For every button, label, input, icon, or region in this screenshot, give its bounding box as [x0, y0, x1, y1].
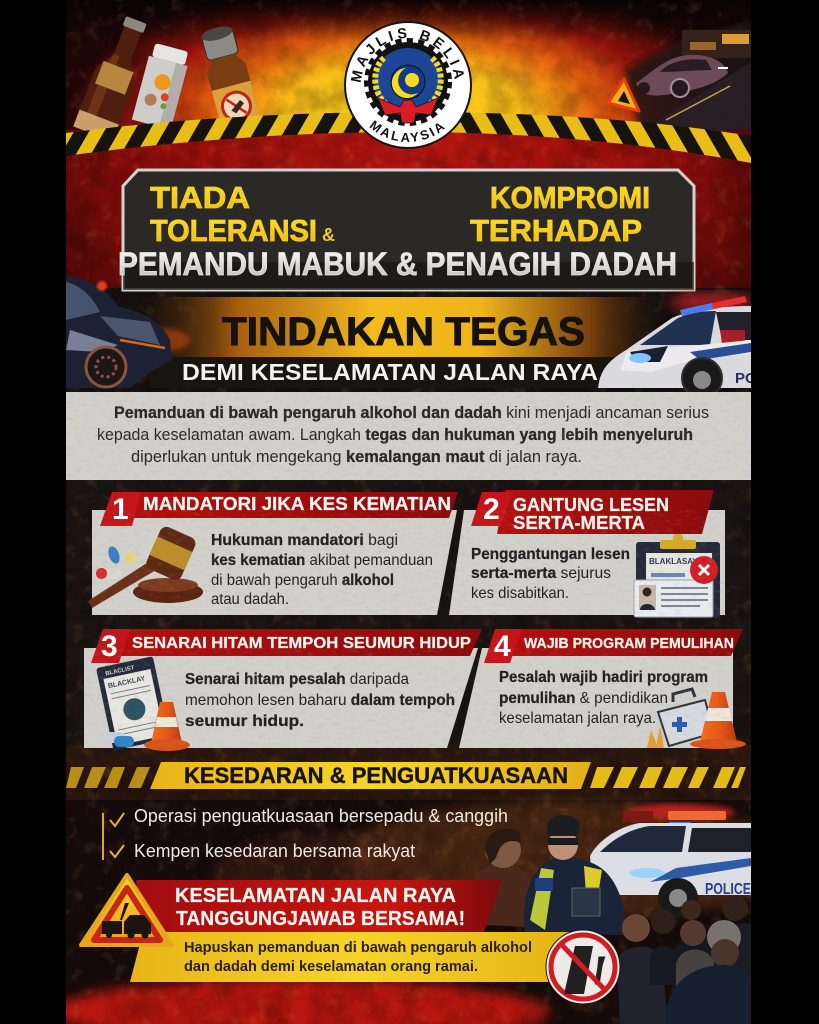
- logo wreath right: [430, 58, 441, 104]
- text: card 2: Penggantungan lesen: [471, 546, 630, 563]
- icon: clipboard and licence: [634, 533, 720, 618]
- icon: red cross: [690, 556, 718, 584]
- banner line 2: TANGGUNGJAWAB BERSAMA!: [176, 908, 465, 930]
- icon: blacklist clipboard: BLACLIST: [105, 665, 135, 677]
- scene: crashed car: [66, 276, 190, 388]
- intro line 3: diperlukan untuk mengekang kemalangan maut di jalan raya.: [131, 448, 582, 466]
- banner: shared responsibility: [136, 880, 502, 932]
- heading bar: Kesedaran & Penguatkuasaan: [66, 762, 746, 789]
- checklist: [103, 806, 508, 861]
- number 2: [471, 492, 513, 526]
- icon: blacklist clipboard: BLACKLAY: [107, 675, 146, 690]
- panel: title: [118, 170, 694, 290]
- header text line 2: SERTA-MERTA: [513, 513, 645, 533]
- text: card 1: [211, 532, 433, 608]
- icon: crash: [102, 903, 151, 938]
- subheading: DEMI KESELAMATAN JALAN RAYA: [182, 359, 598, 385]
- text: card 1: atau dadah.: [211, 591, 289, 608]
- number 3: [91, 629, 130, 663]
- logo: Majlis Belia Malaysia: [344, 21, 472, 149]
- scene: night road with car and warning triangle: [608, 22, 751, 132]
- icon: pills: [96, 545, 136, 579]
- header: card 3: 3: [101, 630, 118, 663]
- title: Tiada: TIADA: [150, 180, 250, 215]
- text: card 4: [499, 669, 708, 727]
- text: card 2: kes disabitkan.: [471, 585, 569, 602]
- panel: warning triangle sign: [81, 875, 172, 945]
- text: card 4: Pesalah wajib hadiri program: [499, 669, 708, 686]
- panel: intro: [66, 392, 751, 480]
- logo text: MAJLIS BELIA: MAJLIS BELIA: [350, 28, 464, 82]
- scene: police car: [598, 292, 757, 398]
- title: Toleransi: TOLERANSI: [150, 213, 317, 248]
- text: card 3: Senarai hitam pesalah daripada: [185, 671, 409, 688]
- icon: brown bottle: [73, 16, 146, 131]
- police label: POLICE: [705, 881, 751, 898]
- icon: white pill bottle: [132, 44, 188, 124]
- icon: prohibited bottle: [202, 26, 260, 118]
- header: card 1: 1: [112, 493, 129, 526]
- icon: gavel: [88, 525, 203, 608]
- text: card 3: memohon lesen baharu dalam tempoh: [185, 692, 455, 709]
- text: card 1: Hukuman mandatori bagi: [211, 532, 398, 549]
- intro line 1: Pemanduan di bawah pengaruh alkohol dan dadah kini menjadi ancaman serius: [114, 404, 709, 422]
- text: card 1: kes kematian akibat pemanduan: [211, 552, 433, 569]
- paper texture overlay: [66, 392, 751, 752]
- car label: PO: [735, 370, 757, 387]
- call to action line 1: Hapuskan pemanduan di bawah pengaruh alkohol: [184, 940, 532, 956]
- header: card 4: 4: [494, 630, 511, 663]
- illustration: man in brown jacket: [460, 829, 562, 928]
- banner line 1: KESELAMATAN JALAN RAYA: [175, 885, 456, 907]
- header text: SENARAI HITAM TEMPOH SEUMUR HIDUP: [132, 635, 471, 652]
- icon: bottle: [564, 946, 593, 994]
- header text line 1: GANTUNG LESEN: [513, 495, 669, 515]
- caution tape top: [66, 112, 751, 163]
- title: Terhadap: TERHADAP: [470, 213, 642, 248]
- header: card 4: [484, 629, 743, 663]
- light bar: [680, 296, 747, 316]
- panel: card 3: [84, 629, 482, 751]
- logo red emblem: [378, 98, 438, 123]
- hazard stripes left: [66, 767, 150, 788]
- panel: card 4: [459, 629, 746, 749]
- title: Kompromi: KOMPROMI: [490, 180, 650, 215]
- icon: blacklist clipboard: [96, 656, 170, 750]
- icon: syringe: [594, 956, 606, 985]
- panel: card 2: [449, 490, 725, 618]
- heading text: KESEDARAN & PENGUATKUASAAN: [184, 763, 568, 788]
- icon: bottles: [73, 16, 260, 131]
- illustration: police officer: [524, 815, 628, 935]
- text: card 4: pemulihan & pendidikan: [499, 690, 668, 707]
- number 4: [484, 629, 522, 663]
- header: card 3: [91, 629, 482, 663]
- scene: police car bottom: [590, 804, 751, 918]
- logo wreath left: [375, 58, 386, 104]
- hazard stripes right: [590, 767, 746, 788]
- icon: no alcohol sign: [546, 930, 620, 1004]
- header text: MANDATORI JIKA KES KEMATIAN: [143, 494, 451, 514]
- icon: clipboard and licence: BLAKLASAY: [649, 557, 698, 566]
- icon: first aid kit: [647, 689, 714, 748]
- text: card 3: seumur hidup.: [185, 713, 304, 730]
- title: ampersand: &: [322, 225, 335, 245]
- header: card 2: [471, 490, 714, 534]
- heading: Tindakan Tegas: TINDAKAN TEGAS: [222, 310, 585, 354]
- logo text: MALAYSIA: MALAYSIA: [370, 120, 445, 142]
- header: card 1: [100, 492, 458, 526]
- text: card 2: [471, 546, 630, 602]
- banner: Demi Keselamatan Jalan Raya: [150, 357, 630, 388]
- header text: WAJIB PROGRAM PEMULIHAN: [524, 636, 734, 652]
- number 1: [100, 492, 141, 526]
- panel: card 1: [88, 492, 458, 615]
- check 1: [110, 813, 124, 826]
- text: card 4: keselamatan jalan raya.: [499, 710, 656, 727]
- intro line 2: kepada keselamatan awam. Langkah tegas dan hukuman yang lebih menyeluruh: [97, 426, 693, 444]
- logo gear: [368, 42, 448, 122]
- item 1: Operasi penguatkuasaan bersepadu & canggih: [134, 806, 508, 826]
- text: card 1: di bawah pengaruh alkohol: [211, 572, 394, 589]
- check 2: [110, 845, 124, 857]
- logo crescent and star: [392, 68, 418, 98]
- text: card 2: serta-merta sejurus: [471, 565, 611, 582]
- call to action line 2: dan dadah demi keselamatan orang ramai.: [184, 959, 478, 975]
- header: card 2: 2: [483, 493, 500, 526]
- title: Pemandu Mabuk & Penagih Dadah: PEMANDU MABUK & PENAGIH DADAH: [118, 246, 677, 282]
- icon: traffic cone: [690, 692, 746, 749]
- item 2: Kempen kesedaran bersama rakyat: [134, 841, 415, 861]
- text: card 3: [185, 671, 455, 730]
- icon: traffic cone: [144, 702, 190, 751]
- banner: Tindakan Tegas: [130, 297, 670, 357]
- illustration: crowd: [617, 895, 751, 1024]
- banner: call to action: [130, 932, 590, 982]
